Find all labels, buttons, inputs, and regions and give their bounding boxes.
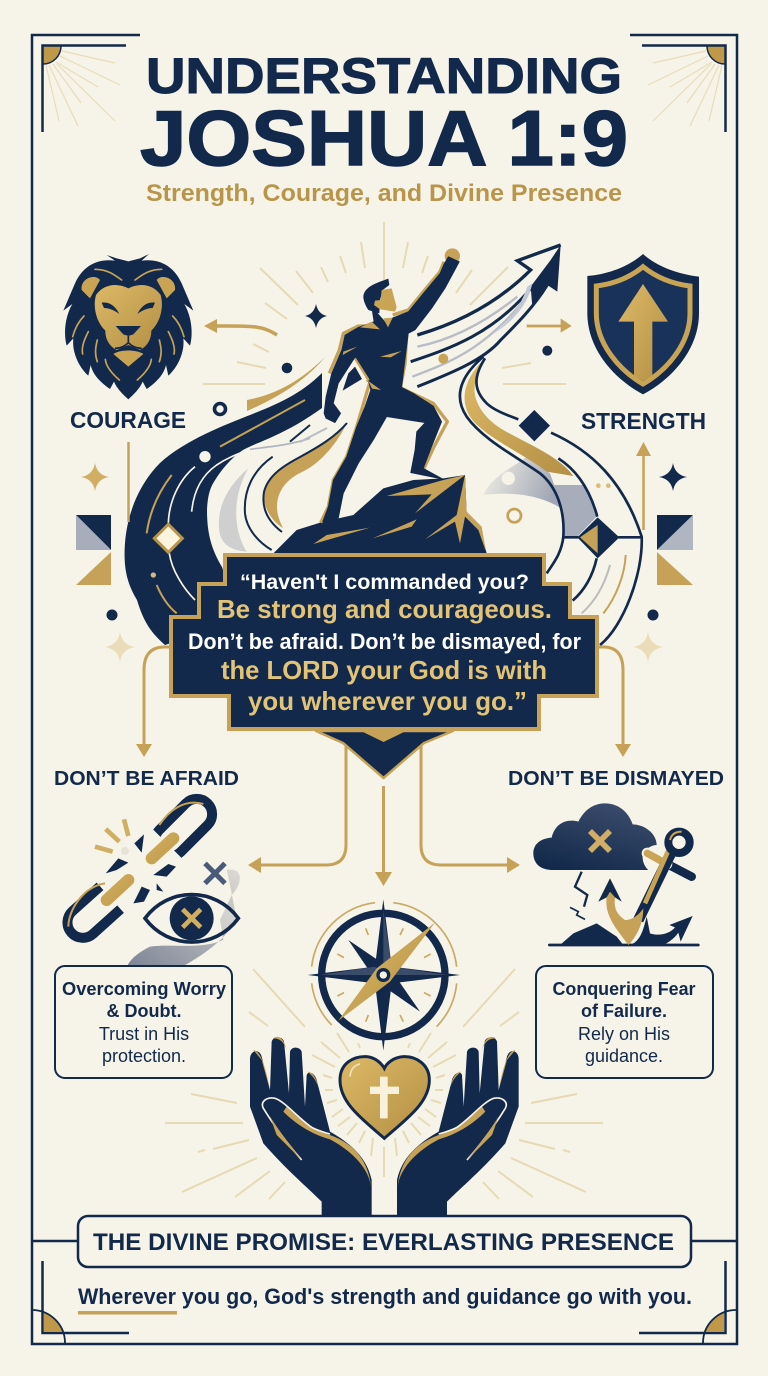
quote pointer [316, 731, 453, 778]
icon: broken chain and eye [61, 793, 240, 966]
center connector arrows [248, 745, 520, 886]
corner ornament bottom left [32, 1261, 129, 1343]
icon: cloud and anchor [533, 803, 698, 945]
quote text: Be strong and courageous. [217, 594, 552, 624]
quote panel [171, 555, 597, 729]
icon: lion [63, 254, 193, 399]
icon: heart with cross [340, 1057, 429, 1138]
icon: right hand [397, 1037, 519, 1215]
corner ornament top right [642, 46, 726, 132]
flowing ribbon right [460, 357, 643, 645]
quote text [188, 571, 581, 716]
label: don't be dismayed: DON’T BE DISMAYED [508, 768, 724, 790]
side decorations right [633, 442, 693, 662]
promise sentence: Wherever you go, God's strength and guidance go with you. [78, 1284, 692, 1309]
panel: conquering fear: of Failure. [581, 1001, 667, 1021]
label: strength: STRENGTH [581, 408, 706, 434]
label: don't be afraid: DON’T BE AFRAID [54, 768, 239, 790]
panel: conquering fear: Rely on His [578, 1024, 670, 1044]
figure [321, 248, 460, 523]
rock [273, 475, 487, 553]
panel: overcoming worry: protection. [102, 1046, 186, 1066]
connector arrow: left to don't be afraid [136, 647, 170, 757]
quote text: the LORD your God is with [221, 655, 547, 685]
panel: overcoming worry [55, 966, 232, 1078]
promise banner [78, 1216, 691, 1267]
panel: overcoming worry: & Doubt. [107, 1001, 181, 1021]
decor dots and star left of figure [214, 304, 327, 414]
flowing wave left [125, 357, 347, 645]
rays behind figure [203, 222, 566, 384]
title: UNDERSTANDING [146, 48, 622, 104]
panel: overcoming worry: Trust in His [99, 1024, 189, 1044]
quote text: “Haven't I commanded you? [240, 571, 529, 594]
panel: overcoming worry: Overcoming Worry [62, 979, 226, 999]
arrow: to shield and dot [527, 318, 572, 356]
arrow swoosh right [411, 245, 561, 387]
side decorations left [76, 442, 135, 662]
title: JOSHUA 1:9 [140, 94, 628, 182]
promise connector lines [32, 1240, 737, 1242]
quote text: you wherever you go.” [248, 686, 527, 716]
icon: left hand [250, 1037, 372, 1215]
corner ornament top left [42, 46, 126, 132]
panel: conquering fear [536, 966, 713, 1078]
subtitle: Strength, Courage, and Divine Presence [146, 180, 622, 207]
connector arrow: right to don't be dismayed [598, 647, 631, 757]
arrow: to lion [204, 319, 277, 335]
icon: compass [308, 899, 460, 1051]
icon: shield [587, 254, 699, 394]
promise banner: THE DIVINE PROMISE: EVERLASTING PRESENCE [93, 1229, 674, 1256]
panel: conquering fear: Conquering Fear [552, 979, 696, 999]
label: courage: COURAGE [70, 407, 186, 433]
panel: conquering fear: guidance. [585, 1046, 663, 1066]
underline [78, 1311, 177, 1314]
rays around hands and heart [165, 969, 603, 1199]
corner ornament bottom right [639, 1261, 736, 1343]
title [140, 48, 628, 182]
quote text: Don’t be afraid. Don’t be dismayed, for [188, 629, 581, 654]
